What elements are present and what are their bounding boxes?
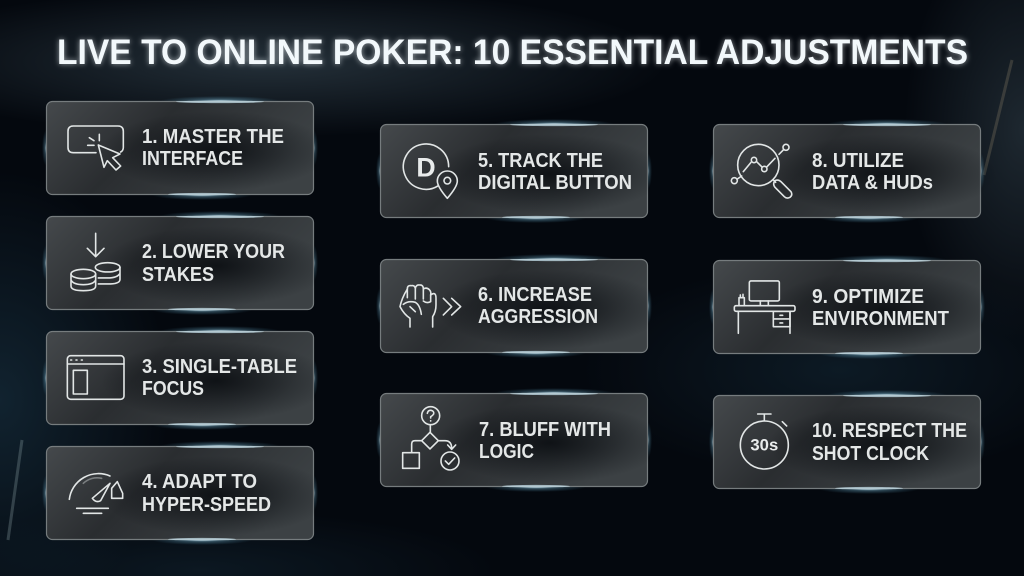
label: HYPER-SPEED [142, 494, 271, 516]
label: STAKES [142, 264, 214, 286]
icon: dealer button with pin: D [416, 152, 436, 182]
label: ENVIRONMENT [812, 308, 949, 330]
card 7: bluff with logic [376, 388, 665, 492]
icon: stopwatch 30s [740, 414, 788, 469]
label: AGGRESSION [478, 306, 598, 328]
label [142, 126, 284, 170]
card 9: optimize environment [709, 255, 998, 359]
label: 7. BLUFF WITH [479, 419, 611, 441]
icon: magnifier over line chart [731, 144, 792, 198]
label [478, 284, 598, 328]
title: LIVE TO ONLINE POKER: 10 ESSENTIAL ADJUSTMENTS [57, 33, 968, 72]
card 5: track the digital button [376, 119, 665, 223]
label [478, 150, 632, 194]
label: 8. UTILIZE [812, 150, 904, 172]
label: 1. MASTER THE [142, 126, 284, 148]
icon: down arrow over coins [71, 233, 120, 291]
label: 10. RESPECT THE [812, 420, 967, 442]
icon: decision flowchart [403, 407, 459, 470]
label: DATA & HUDs [812, 172, 933, 194]
label: SHOT CLOCK [812, 443, 929, 465]
label: 9. OPTIMIZE [812, 286, 924, 308]
label [812, 286, 949, 330]
card 1: master the interface [42, 96, 331, 200]
label: DIGITAL BUTTON [478, 172, 632, 194]
card 4: adapt to hyper-speed [42, 441, 331, 545]
label [479, 419, 611, 463]
label [142, 241, 285, 286]
label: INTERFACE [142, 148, 243, 170]
card 3: single-table focus [42, 326, 331, 430]
icon: cursor clicking button [68, 126, 123, 170]
label: 5. TRACK THE [478, 150, 603, 172]
label: 4. ADAPT TO [142, 471, 257, 493]
label: 3. SINGLE-TABLE [142, 356, 297, 378]
label: FOCUS [142, 378, 204, 400]
icon: stopwatch 30s: 30s [750, 436, 778, 455]
label [142, 471, 271, 516]
icon: fist with chevrons [400, 285, 461, 327]
label [142, 356, 297, 400]
label: 2. LOWER YOUR [142, 241, 285, 263]
icon: dealer button with pin [403, 144, 457, 198]
card 10: respect the shot clock [709, 390, 998, 494]
label: LOGIC [479, 441, 534, 463]
icon: speedometer [69, 474, 123, 513]
label: 6. INCREASE [478, 284, 592, 306]
label [812, 150, 933, 194]
card 2: lower your stakes [42, 211, 331, 315]
icon: browser window [67, 356, 124, 399]
card 6: increase aggression [376, 254, 665, 358]
icon: desk with monitor [734, 281, 795, 333]
card 8: utilize data and huds [709, 119, 998, 223]
label [812, 420, 967, 465]
